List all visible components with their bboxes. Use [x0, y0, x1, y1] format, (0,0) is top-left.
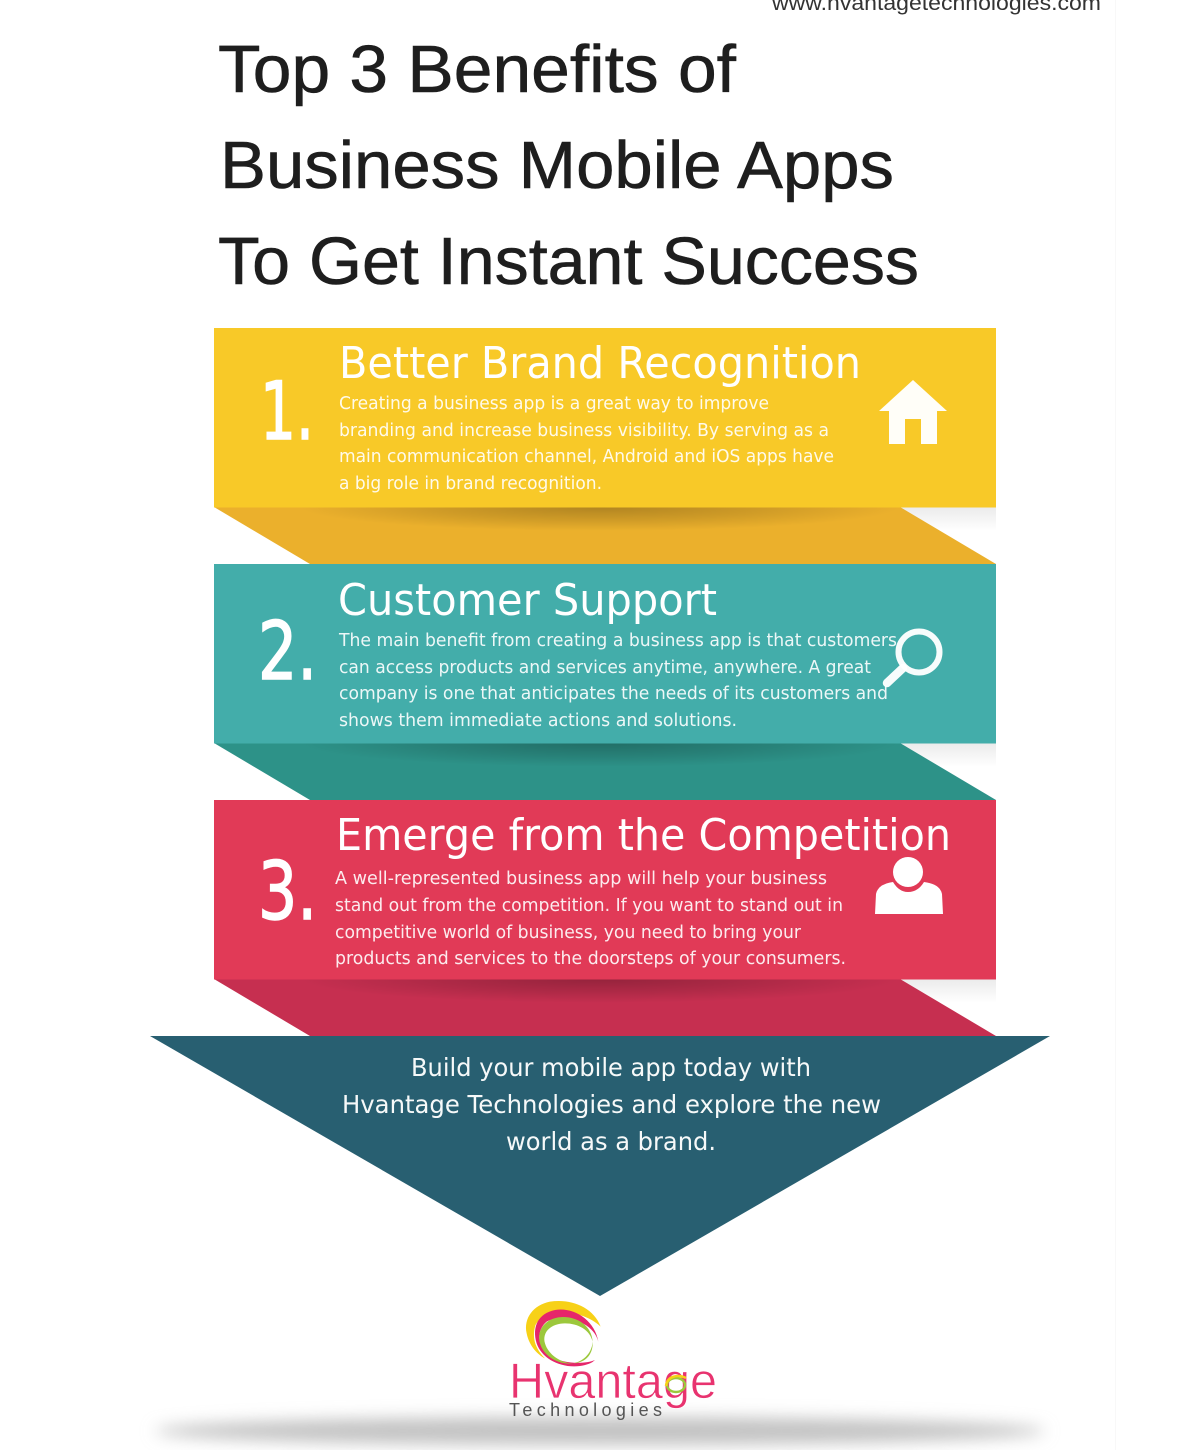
title: Business Mobile Apps: [220, 128, 894, 203]
body text 3: stand out from the competition. If you want to stand out in: [335, 895, 843, 916]
body text 1: Creating a business app is a great way to improve: [339, 393, 769, 414]
icon: house: [879, 380, 947, 444]
title: [218, 32, 919, 299]
heading: customer support: Customer Support: [338, 575, 717, 626]
title: Top 3 Benefits of: [218, 32, 736, 107]
number 1: 1.: [260, 365, 314, 458]
body text 2: The main benefit from creating a business app is that customers: [338, 630, 897, 651]
call to action text: world as a brand.: [506, 1127, 716, 1156]
number 3: 3.: [258, 845, 317, 938]
heading: emerge from the competition: Emerge from the Competition: [336, 810, 951, 861]
logo swirl: [526, 1301, 601, 1366]
ground shadow: [155, 1417, 1045, 1445]
panel: fold shadows: [880, 507, 996, 1003]
body text 2: [338, 630, 897, 731]
heading: better brand recognition: Better Brand Recognition: [339, 338, 861, 389]
body text 3: competitive world of business, you need to bring your: [335, 922, 802, 943]
panel: yellow fold: [215, 508, 996, 564]
icon: person: [875, 857, 943, 914]
body text 2: can access products and services anytime, anywhere. A great: [339, 657, 871, 678]
call to action text: [342, 1053, 881, 1156]
panel: benefit 2: [214, 564, 996, 744]
body text 1: main communication channel, Android and iOS apps have: [339, 446, 834, 467]
body text 3: [335, 868, 846, 969]
call to action text: Build your mobile app today with: [411, 1053, 811, 1082]
panel: red fold: [215, 980, 996, 1036]
logo small swirl: [666, 1376, 686, 1392]
icon: magnifying glass: [887, 632, 940, 683]
title: To Get Instant Success: [218, 224, 919, 299]
body text 1: branding and increase business visibility. By serving as a: [339, 420, 829, 441]
panel: teal fold: [215, 744, 996, 800]
logo: Hvantage Technologies: [509, 1301, 717, 1420]
body text 3: products and services to the doorsteps of your consumers.: [335, 948, 846, 969]
body text 2: company is one that anticipates the needs of its customers and: [339, 683, 888, 704]
panel: call to action arrow: [150, 1036, 1050, 1296]
panel: benefit 3: [214, 800, 996, 980]
call to action text: Hvantage Technologies and explore the new: [342, 1090, 881, 1119]
body text 3: A well-represented business app will help your business: [335, 868, 827, 889]
logo tagline: Technologies: [509, 1400, 662, 1420]
number 2: 2.: [258, 605, 317, 698]
body text 1: a big role in brand recognition.: [339, 473, 602, 494]
logo wordmark: Hvantage: [509, 1353, 717, 1409]
panel: benefit 1: [214, 328, 996, 508]
body text 2: shows them immediate actions and solutions.: [339, 710, 737, 731]
body text 1: [339, 393, 834, 494]
